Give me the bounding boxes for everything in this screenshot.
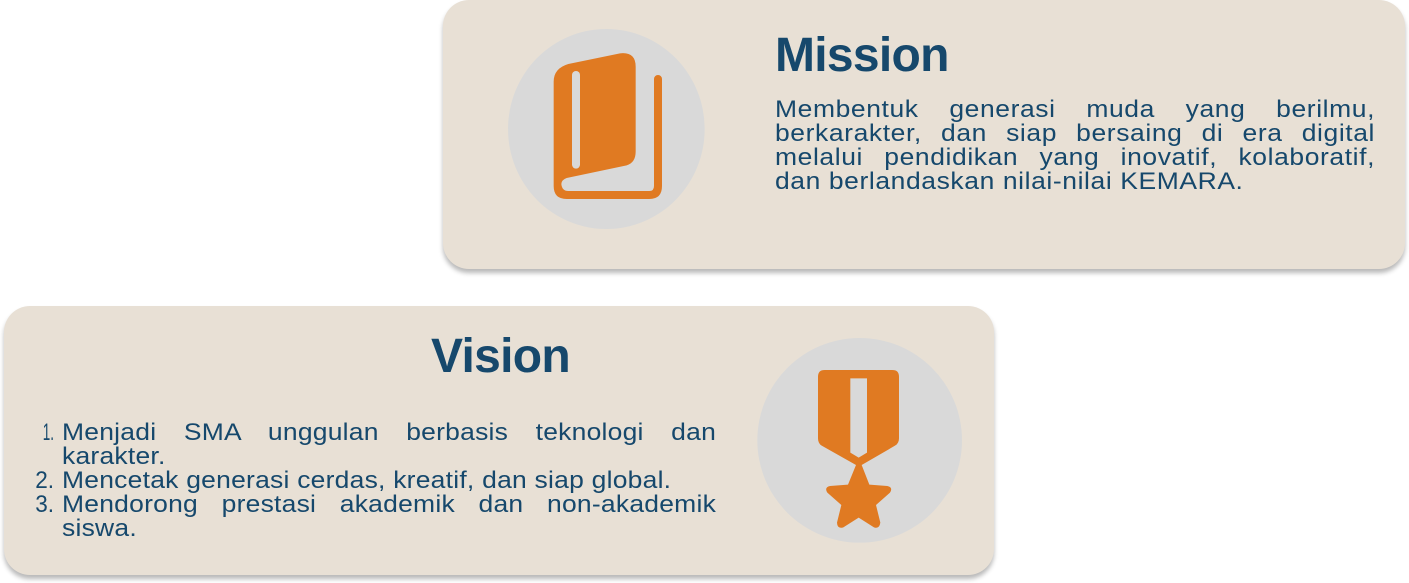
text block: mission statement: melalui pendidikan yang inovatif, kolaboratif,	[775, 144, 1375, 171]
icon: book	[508, 29, 704, 229]
text block: mission statement: Membentuk generasi muda yang berilmu,	[775, 96, 1375, 123]
list item 1: Menjadi SMA unggulan berbasis teknologi dan	[62, 419, 716, 446]
text block: mission statement: berkarakter, dan siap bersaing di era digital	[775, 120, 1375, 147]
list item 3: Mendorong prestasi akademik dan non-akademik	[62, 491, 716, 518]
list item 2: Mencetak generasi cerdas, kreatif, dan siap global.	[62, 467, 671, 494]
numbered list: vision goals	[35, 419, 716, 542]
list item 1: 1.	[43, 419, 54, 446]
panel: mission	[443, 0, 1405, 269]
text block: mission statement	[775, 96, 1375, 195]
list item 3	[35, 491, 716, 542]
heading: vision: Vision	[431, 330, 570, 383]
list item 2: 2.	[35, 467, 54, 494]
list item 1: karakter.	[62, 443, 166, 470]
icon: medal	[758, 338, 962, 542]
text block: mission statement: dan berlandaskan nilai-nilai KEMARA.	[775, 168, 1244, 195]
list item 1	[43, 419, 716, 470]
list item 3: 3.	[35, 491, 54, 518]
heading: mission: Mission	[775, 29, 949, 82]
list item 3: siswa.	[62, 515, 137, 542]
panel: vision	[4, 306, 994, 575]
